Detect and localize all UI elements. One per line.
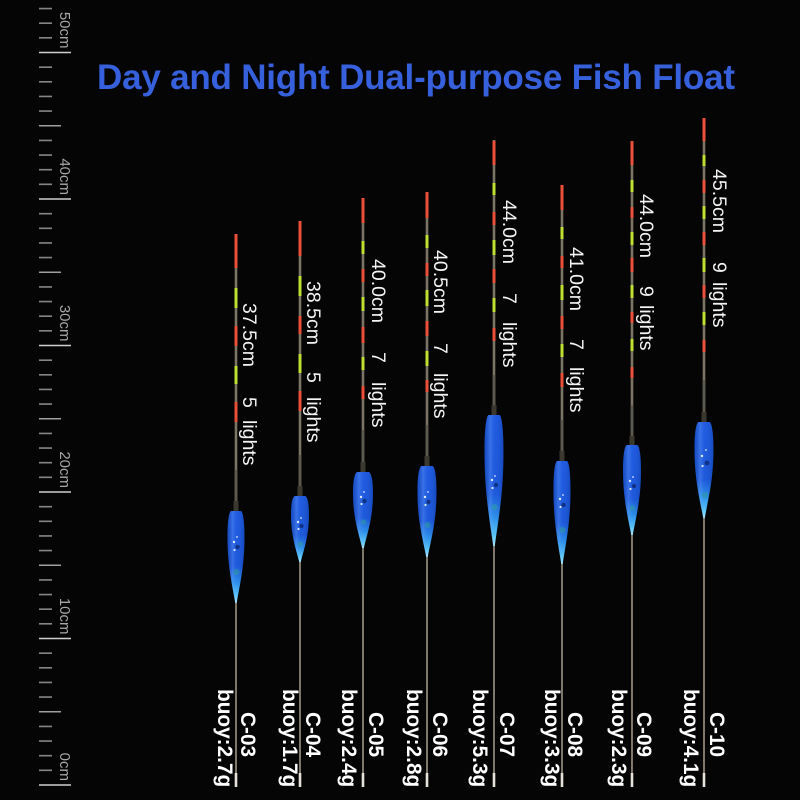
float C-05 <box>337 198 389 787</box>
label: C-09 dimensions: 44.0cm <box>635 194 657 258</box>
title: Day and Night Dual-purpose Fish Float <box>97 58 735 97</box>
label: C-08 dimensions <box>565 247 587 413</box>
label: C-10 dimensions: lights <box>708 282 730 328</box>
label: C-08 dimensions: 41.0cm <box>565 247 587 311</box>
label: C-05 buoyancy: buoy:2.4g <box>337 689 360 787</box>
label: C-10 dimensions: 45.5cm <box>708 169 730 233</box>
label: C-08 dimensions: lights <box>565 367 587 413</box>
label: C-06 dimensions: lights <box>429 373 451 419</box>
label: C-04 dimensions: 38.5cm <box>302 281 324 345</box>
label: C-06 dimensions: 40.5cm <box>429 250 451 314</box>
label: C-07 buoyancy: buoy:5.3g <box>468 689 491 787</box>
float C-06 <box>402 192 451 787</box>
label: C-09 dimensions: 9 <box>635 286 657 297</box>
label: C-04 model: C-04 <box>301 712 324 758</box>
float C-10 <box>679 118 730 787</box>
label: C-08 buoyancy: buoy:3.3g <box>540 689 563 787</box>
label: C-09 dimensions <box>635 194 657 351</box>
label: C-03 model: C-03 <box>236 712 259 757</box>
label: C-07 dimensions: 44.0cm <box>498 200 520 264</box>
label: C-03 dimensions: 5 <box>238 397 260 408</box>
label: C-10 dimensions <box>708 169 730 328</box>
float C-07 <box>468 140 520 787</box>
label: C-04 buoyancy: buoy:1.7g <box>278 689 301 787</box>
label: C-07 dimensions <box>498 200 520 368</box>
label: C-06 dimensions: 7 <box>429 343 451 354</box>
label: C-05 dimensions: lights <box>367 382 389 428</box>
label: C-04 dimensions: lights <box>302 397 324 443</box>
label: C-09 model: C-09 <box>632 712 655 757</box>
label: C-05 dimensions <box>367 259 389 428</box>
ruler scale: 10cm <box>56 598 73 634</box>
float C-09 <box>607 141 657 787</box>
ruler scale: 40cm <box>56 158 73 195</box>
label: C-05 dimensions: 7 <box>367 352 389 363</box>
ruler scale: 0cm <box>56 753 73 781</box>
ruler scale: 30cm <box>56 305 73 342</box>
label: C-07 dimensions: lights <box>498 322 520 368</box>
label: C-06 dimensions <box>429 250 451 419</box>
label: C-03 dimensions: lights <box>238 420 260 466</box>
label: C-06 buoyancy: buoy:2.8g <box>402 689 425 787</box>
label: C-07 model: C-07 <box>495 712 518 757</box>
label: C-05 model: C-05 <box>364 712 387 757</box>
float C-08 <box>540 185 587 787</box>
ruler scale: 20cm <box>56 451 73 488</box>
label: C-06 model: C-06 <box>428 712 451 757</box>
ruler scale <box>39 9 73 785</box>
label: C-08 dimensions: 7 <box>565 339 587 350</box>
label: C-03 buoyancy: buoy:2.7g <box>213 689 236 787</box>
label: C-09 dimensions: lights <box>635 305 657 351</box>
label: C-10 dimensions: 9 <box>708 262 730 273</box>
ruler scale: 50cm <box>56 12 73 48</box>
label: C-10 model: C-10 <box>705 712 728 757</box>
label: C-05 dimensions: 40.0cm <box>367 259 389 323</box>
label: C-10 buoyancy: buoy:4.1g <box>679 689 702 787</box>
label: C-04 dimensions <box>302 281 324 443</box>
label: C-03 dimensions: 37.5cm <box>238 303 260 367</box>
float C-03 <box>213 234 260 787</box>
label: C-07 dimensions: 7 <box>498 293 520 304</box>
label: C-09 buoyancy: buoy:2.3g <box>607 689 630 787</box>
float C-04 <box>278 221 324 787</box>
label: C-08 model: C-08 <box>563 712 586 757</box>
label: C-04 dimensions: 5 <box>302 372 324 383</box>
label: C-03 dimensions <box>238 303 260 466</box>
